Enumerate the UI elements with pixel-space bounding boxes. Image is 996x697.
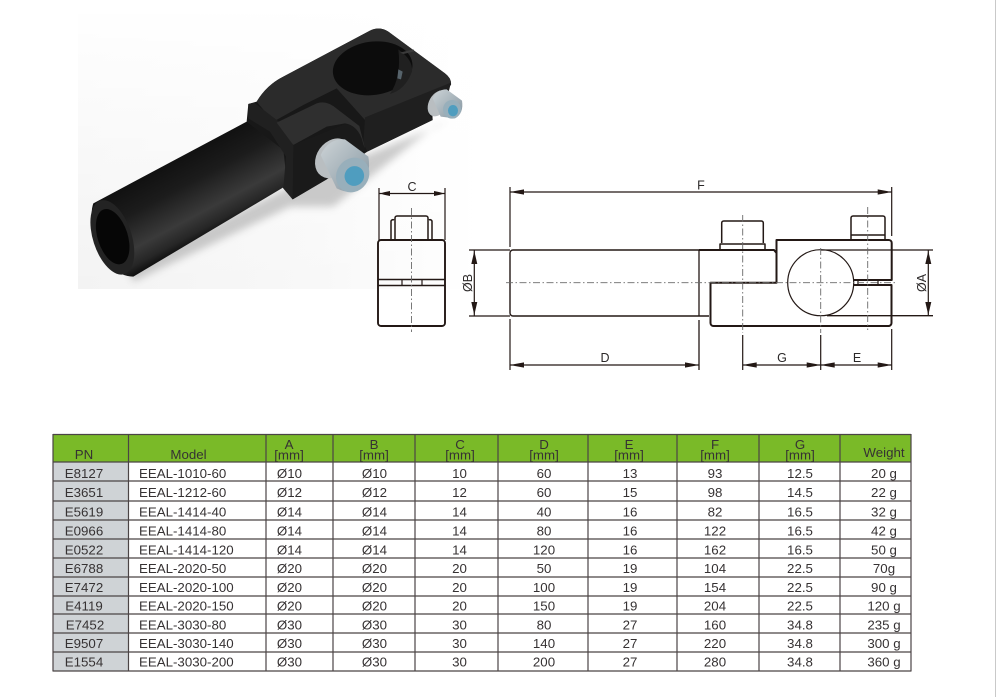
product photo: black clamp connector — [78, 14, 478, 289]
row E0966: 80 — [537, 524, 551, 538]
row E0522: 162 — [704, 542, 726, 558]
dimension D — [510, 319, 699, 370]
table header row: [mm] — [359, 448, 389, 462]
tube body — [92, 122, 287, 277]
row E4119: 19 — [623, 598, 637, 614]
row E4119: 120 g — [867, 598, 901, 614]
row E7452: 80 — [537, 618, 551, 632]
bolt: front — [307, 131, 376, 199]
front view technical drawing — [461, 178, 933, 370]
row E8127: 20 g — [871, 466, 897, 481]
row E0522: Ø14 — [362, 542, 387, 558]
row E4119: 204 — [704, 598, 726, 614]
row E3651: 15 — [623, 485, 637, 500]
row E5619: 82 — [708, 504, 722, 520]
row E8127: 60 — [537, 466, 551, 481]
row E0522: Ø14 — [277, 542, 302, 558]
row E6788: Ø20 — [277, 561, 302, 576]
row E3651: 12 — [452, 485, 467, 500]
dimension F: F — [697, 178, 705, 192]
row E9507: 140 — [533, 636, 555, 651]
table header row: [mm] — [700, 448, 730, 462]
row E7452 — [66, 618, 901, 632]
row E3651: 22 g — [871, 485, 897, 500]
table header row: B — [370, 437, 379, 452]
row E1554: EEAL-3030-200 — [139, 654, 234, 670]
row E0966: 16.5 — [787, 524, 813, 538]
row E7472: Ø20 — [277, 580, 302, 595]
row E9507: 300 g — [867, 636, 901, 651]
row E9507: 27 — [623, 636, 637, 651]
row E0522: EEAL-1414-120 — [139, 542, 234, 558]
dimension E — [821, 329, 892, 370]
row E4119: 20 — [452, 598, 467, 614]
row E4119: Ø20 — [362, 598, 387, 614]
dimension diameter A — [915, 250, 931, 316]
row E9507: Ø30 — [277, 636, 302, 651]
specifications table — [53, 434, 911, 672]
connector silhouette backing — [247, 29, 451, 199]
row E0522: 50 g — [871, 542, 897, 558]
row E4119: E4119 — [65, 598, 103, 614]
row E9507: 30 — [452, 636, 467, 651]
row E1554 — [65, 654, 901, 670]
clamp bore — [329, 36, 416, 100]
side view technical drawing — [378, 180, 445, 332]
row E7452: 27 — [623, 618, 637, 632]
row E3651: 14.5 — [787, 485, 813, 500]
dimension diameter B — [461, 250, 510, 316]
row E9507: EEAL-3030-140 — [139, 636, 234, 651]
table header row: F — [711, 437, 719, 452]
row E1554: 34.8 — [787, 654, 813, 670]
row E6788 — [65, 561, 895, 576]
row E0966: 122 — [704, 524, 726, 538]
row E1554: 200 — [533, 654, 555, 670]
row E7452: 34.8 — [787, 618, 813, 632]
collar side face — [248, 103, 294, 199]
row E5619: 16.5 — [787, 504, 813, 520]
row E6788: 22.5 — [787, 561, 813, 576]
row E6788: Ø20 — [362, 561, 387, 576]
row E0522: 14 — [452, 542, 467, 558]
row E0966: Ø14 — [362, 524, 387, 538]
row E7472: 20 — [452, 580, 467, 595]
row E7452: Ø30 — [277, 618, 302, 632]
clamp front face — [363, 83, 451, 152]
row E3651: 98 — [708, 485, 722, 500]
clamp outline — [699, 240, 892, 326]
row E8127 — [65, 466, 897, 481]
clamp top face — [257, 29, 451, 122]
row E7452: 235 g — [867, 618, 901, 632]
table header row: PN — [75, 447, 93, 462]
table header row: E — [625, 437, 634, 452]
row E5619: Ø14 — [362, 504, 387, 520]
row E8127: Ø10 — [362, 466, 387, 481]
dimension F — [510, 178, 892, 247]
table header row: D — [539, 437, 549, 452]
row E7452: Ø30 — [362, 618, 387, 632]
row E7472: 19 — [623, 580, 637, 595]
dimension E: E — [853, 351, 861, 365]
table fills — [53, 434, 911, 671]
row E8127: Ø10 — [277, 466, 302, 481]
row E8127: EEAL-1010-60 — [139, 466, 226, 481]
row E7452: EEAL-3030-80 — [139, 618, 226, 632]
row E4119: EEAL-2020-150 — [139, 598, 234, 614]
row E5619 — [65, 504, 897, 520]
bolt right — [851, 216, 885, 240]
row E1554: E1554 — [65, 654, 103, 670]
row E7472 — [65, 580, 897, 595]
row E8127: 10 — [452, 466, 467, 481]
table header row: [mm] — [445, 448, 475, 462]
row E7452: 160 — [704, 618, 726, 632]
row E0522: 16 — [623, 542, 637, 558]
row E1554: 360 g — [867, 654, 901, 670]
side view body — [378, 240, 445, 326]
dimension diameter A: ØA — [915, 273, 929, 292]
row E0966 — [65, 524, 897, 538]
row E3651: EEAL-1212-60 — [139, 485, 226, 500]
row E7472: 154 — [704, 580, 726, 595]
dimension diameter B: ØB — [461, 274, 475, 292]
table header row: [mm] — [274, 448, 304, 462]
row E0522: 16.5 — [787, 542, 813, 558]
row E9507: E9507 — [65, 636, 103, 651]
row E8127: 13 — [623, 466, 637, 481]
row E7472: 100 — [533, 580, 555, 595]
row E5619: EEAL-1414-40 — [139, 504, 226, 520]
table header row: Weight — [863, 445, 905, 460]
dimension D: D — [600, 351, 610, 365]
table header row: [mm] — [785, 448, 815, 462]
row E5619: 32 g — [871, 504, 897, 520]
row E6788: EEAL-2020-50 — [139, 561, 226, 576]
row E7472: 22.5 — [787, 580, 813, 595]
row E6788: 104 — [704, 561, 726, 576]
row E7452: 30 — [452, 618, 467, 632]
table header row: A — [285, 437, 294, 452]
row E0966: 42 g — [871, 524, 897, 538]
dimension G — [743, 335, 821, 370]
row E5619: 40 — [537, 504, 551, 520]
row E5619: E5619 — [65, 504, 103, 520]
tube outline — [510, 250, 709, 316]
bolt: rear — [423, 87, 462, 120]
row E6788: 50 — [537, 561, 551, 576]
row E9507 — [65, 636, 901, 651]
row E5619: 16 — [623, 504, 637, 520]
dimension C: C — [407, 180, 417, 194]
row E0966: EEAL-1414-80 — [139, 524, 226, 538]
row E1554: 280 — [704, 654, 726, 670]
row E7452: E7452 — [66, 618, 104, 632]
table grid — [53, 434, 911, 672]
row E7472: E7472 — [65, 580, 103, 595]
row E8127: E8127 — [65, 466, 103, 481]
row E9507: 220 — [704, 636, 726, 651]
table header row: Model — [170, 447, 207, 462]
side view bolt — [391, 216, 432, 240]
row E6788: E6788 — [65, 561, 103, 576]
row E6788: 70g — [873, 561, 895, 576]
row E1554: Ø30 — [362, 654, 387, 670]
table header row: [mm] — [614, 448, 644, 462]
table header row: [mm] — [529, 448, 559, 462]
row E4119: 22.5 — [787, 598, 813, 614]
row E6788: 20 — [452, 561, 467, 576]
row E0522: E0522 — [65, 542, 103, 558]
row E5619: Ø14 — [277, 504, 302, 520]
dimension G: G — [777, 351, 787, 365]
center lines — [506, 207, 895, 333]
row E3651: Ø12 — [362, 485, 387, 500]
row E5619: 14 — [452, 504, 467, 520]
row E4119: Ø20 — [277, 598, 302, 614]
row E4119 — [65, 598, 901, 614]
row E0522: 120 — [533, 542, 555, 558]
row E1554: 30 — [452, 654, 467, 670]
row E3651: 60 — [537, 485, 551, 500]
row E8127: 12.5 — [787, 466, 813, 481]
row E0966: 14 — [452, 524, 467, 538]
row E0966: 16 — [623, 524, 637, 538]
row E8127: 93 — [708, 466, 722, 481]
row E7472: 90 g — [871, 580, 897, 595]
row E9507: Ø30 — [362, 636, 387, 651]
row E3651: Ø12 — [277, 485, 302, 500]
row E3651: E3651 — [65, 485, 103, 500]
table header row: G — [795, 437, 805, 452]
row E6788: 19 — [623, 561, 637, 576]
row E0522 — [65, 542, 897, 558]
row E0966: E0966 — [65, 524, 103, 538]
collar lug — [277, 102, 365, 148]
table header row: C — [455, 437, 465, 452]
bore circle — [788, 250, 854, 316]
row E0966: Ø14 — [277, 524, 302, 538]
row E1554: 27 — [623, 654, 637, 670]
row E4119: 150 — [533, 598, 555, 614]
table header row — [75, 437, 905, 462]
page edge line — [995, 0, 996, 697]
dimension C — [379, 180, 445, 240]
bolt left — [720, 221, 765, 250]
row E7472: EEAL-2020-100 — [139, 580, 234, 595]
row E9507: 34.8 — [787, 636, 813, 651]
row E1554: Ø30 — [277, 654, 302, 670]
row E7472: Ø20 — [362, 580, 387, 595]
row E3651 — [65, 485, 897, 500]
